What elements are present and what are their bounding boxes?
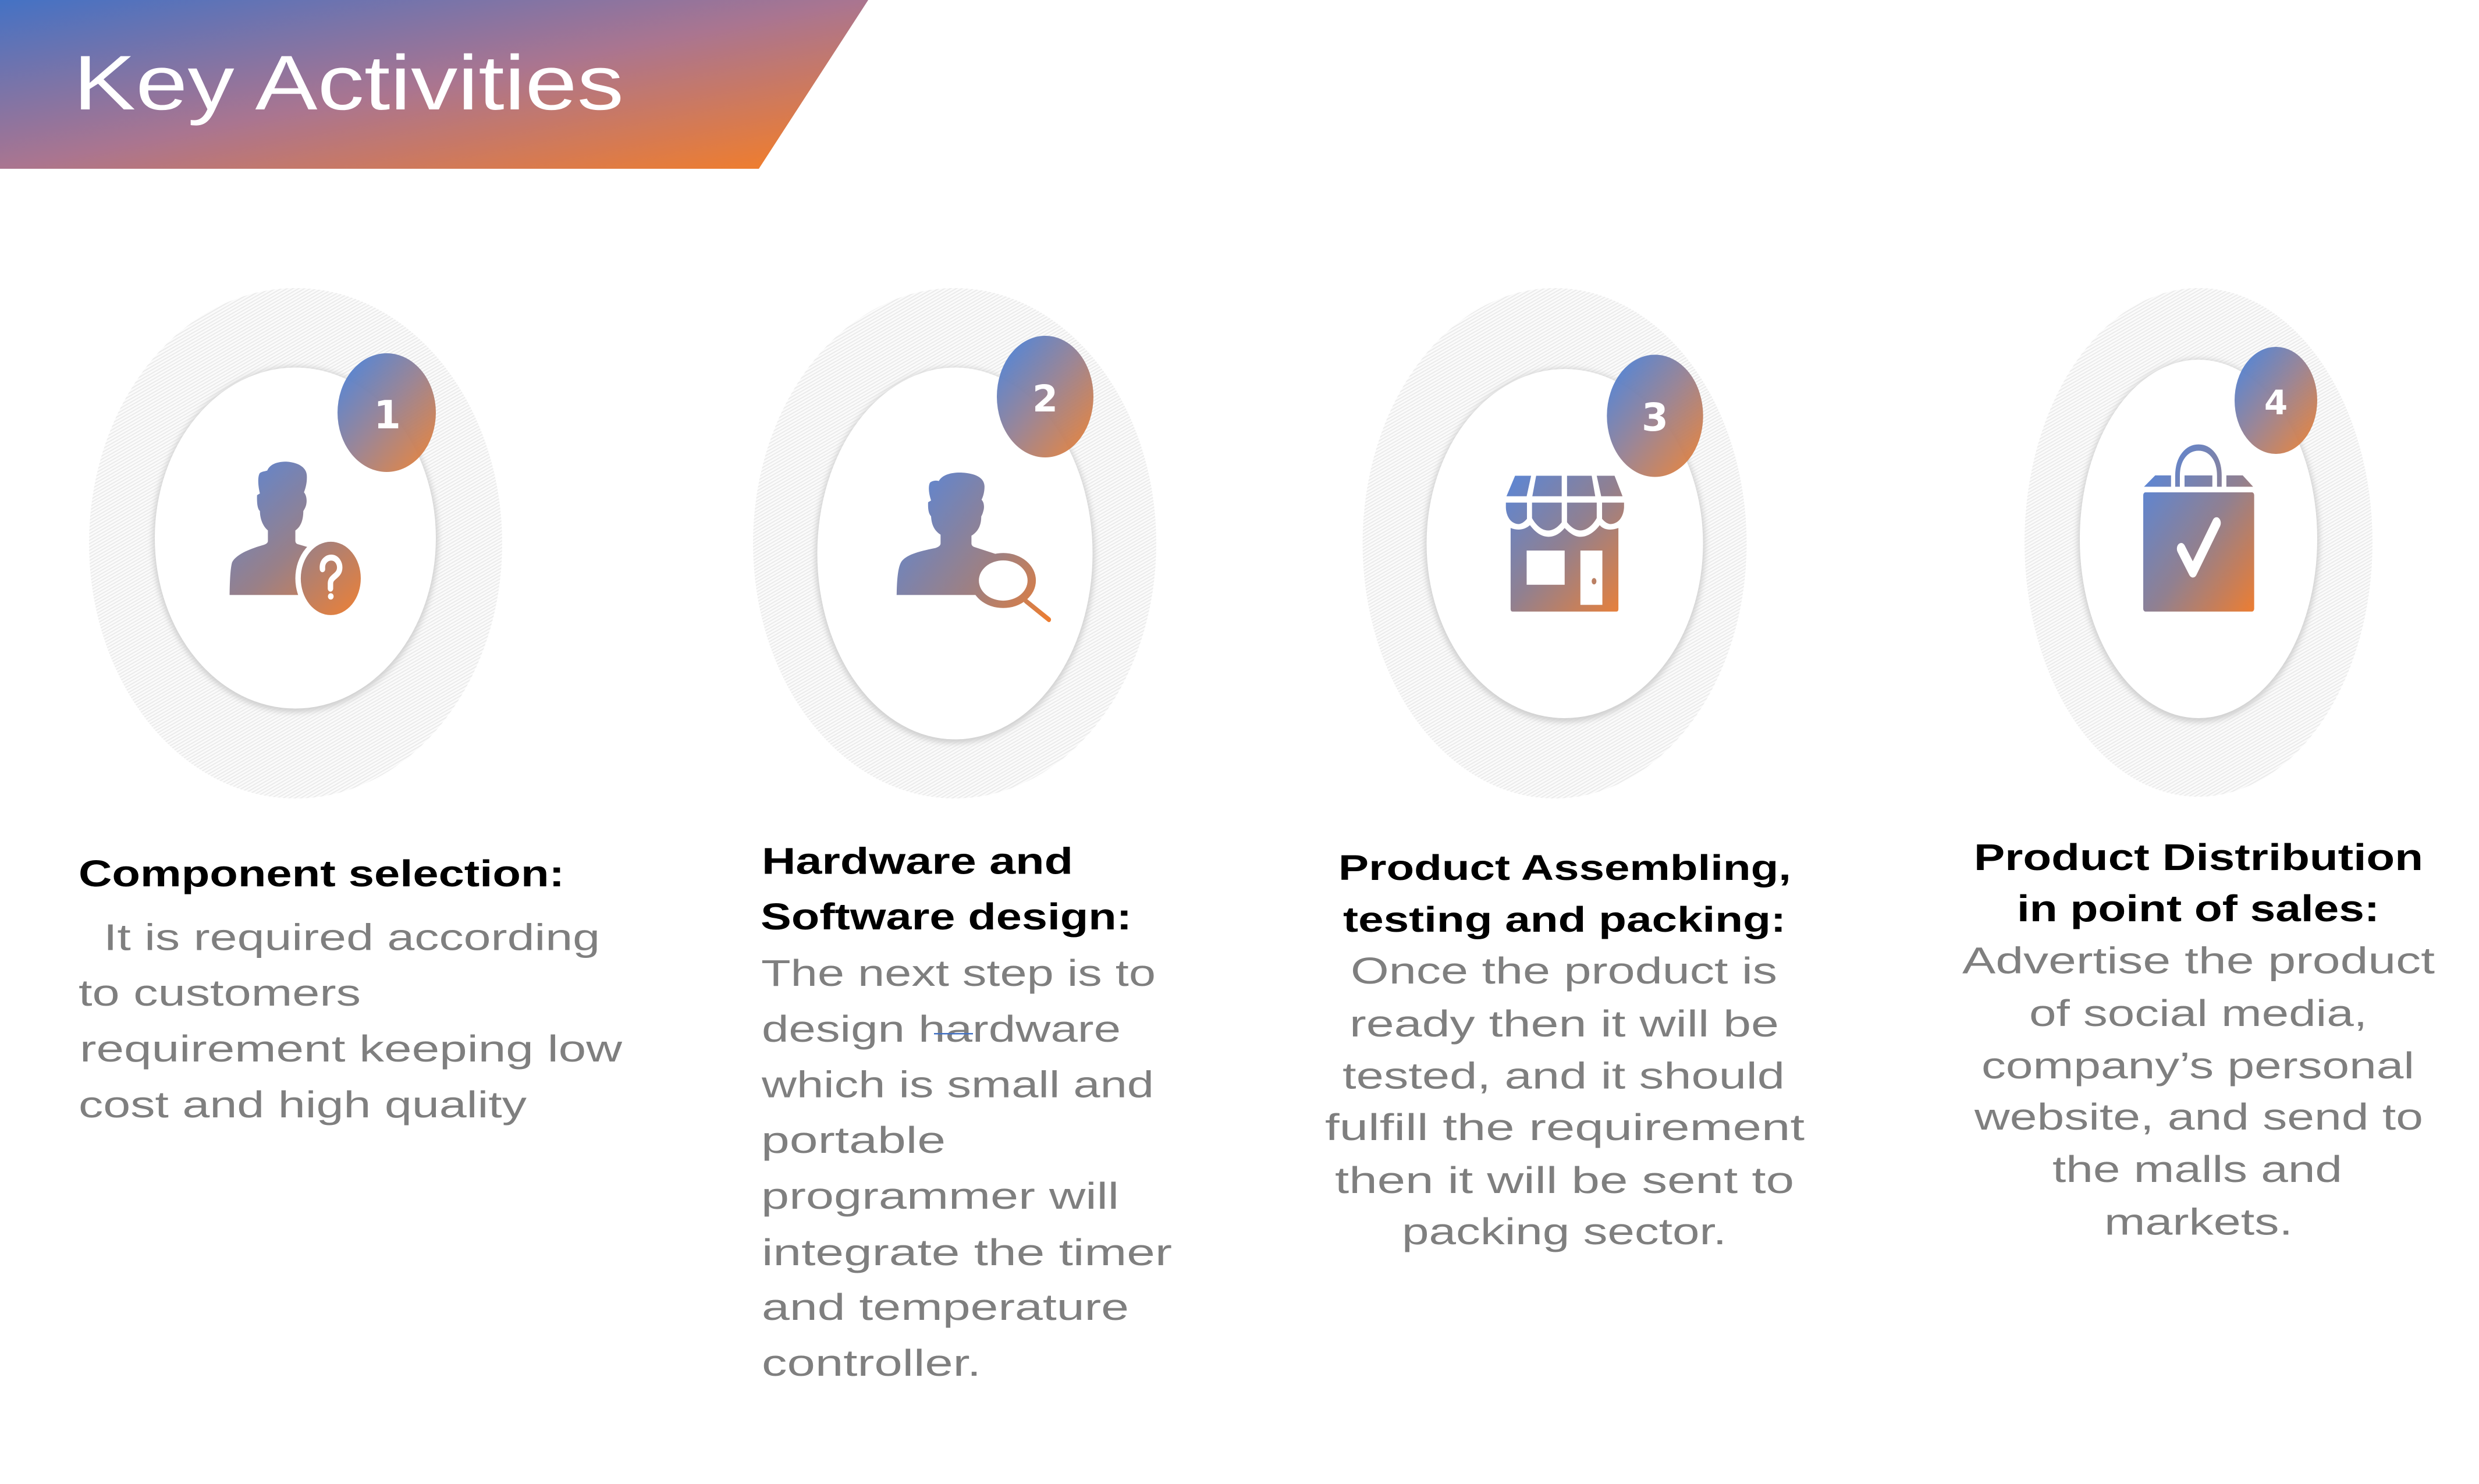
body text: [79, 916, 623, 1126]
heading: hardware and software design: [761, 840, 1132, 938]
outer ring: [753, 288, 1156, 798]
panel: step 2 hardware and software design: [753, 288, 1172, 1384]
badge number 3: [1607, 355, 1703, 477]
body text: design hardware: [762, 1008, 1121, 1050]
badge number 1: [338, 353, 436, 472]
inner circle shadow: [815, 367, 1095, 743]
badge number 2: 2: [1032, 378, 1058, 420]
body text: to customers: [79, 972, 361, 1014]
body text: website, and send to: [1974, 1096, 2423, 1138]
panel: step 1 component selection: [79, 288, 623, 1126]
outer ring: [1363, 288, 1747, 798]
body text: The next step is to: [761, 952, 1156, 994]
body text: markets.: [2104, 1201, 2293, 1243]
icon: shopping bag with check: [2143, 448, 2254, 612]
outer ring: [2025, 288, 2373, 797]
heading: product assembling: Product Assembling,: [1338, 848, 1791, 887]
panel: step 3 product assembling: [1325, 288, 1805, 1252]
heading: product assembling: [1338, 848, 1791, 939]
body text: packing sector.: [1402, 1210, 1727, 1252]
body text: Once the product is: [1351, 950, 1777, 992]
body text: integrate the timer: [762, 1231, 1172, 1273]
title banner: [0, 0, 868, 169]
icon: person with question mark: [230, 461, 366, 621]
body text: programmer will: [761, 1175, 1119, 1217]
badge number 3: 3: [1642, 395, 1668, 440]
heading: product distribution: in point of sales:: [2017, 887, 2379, 929]
icon: person with magnifier: [897, 473, 1049, 620]
body text: cost and high quality: [79, 1084, 527, 1126]
body text: tested, and it should: [1343, 1055, 1785, 1096]
heading: product distribution: Product Distribution: [1974, 836, 2423, 878]
heading: product assembling: testing and packing:: [1343, 900, 1786, 939]
badge number 2: [997, 336, 1093, 457]
body text: ready then it will be: [1349, 1003, 1779, 1045]
title: Key Activities: Key Activities: [73, 40, 624, 126]
body text: of social media,: [2029, 992, 2367, 1034]
inner circle: [1427, 369, 1703, 718]
body text: then it will be sent to: [1335, 1159, 1794, 1201]
heading: product distribution: [1974, 836, 2423, 929]
body text: the malls and: [2052, 1148, 2342, 1190]
body text: requirement keeping low: [80, 1028, 623, 1070]
inner circle shadow: [1425, 368, 1705, 722]
inner circle: [817, 368, 1093, 739]
inner circle shadow: [2077, 359, 2320, 722]
inner circle shadow: [152, 367, 438, 712]
outer ring: [89, 288, 502, 798]
body text: and temperature: [762, 1286, 1129, 1328]
body text: controller.: [762, 1342, 981, 1384]
body text: [1962, 939, 2435, 1243]
badge number 4: 4: [2264, 383, 2288, 423]
badge number 4: [2235, 347, 2317, 454]
body text: company’s personal: [1981, 1045, 2414, 1087]
panel: step 4 product distribution: [1962, 288, 2435, 1243]
body text: fulfill the requirement: [1325, 1106, 1805, 1148]
body text: [1325, 950, 1805, 1252]
stray blue line over the word hardware: [934, 1033, 973, 1035]
icon: storefront: [1506, 476, 1624, 612]
badge number 1: 1: [374, 392, 401, 438]
heading: component selection: Component selection:: [79, 853, 564, 894]
heading: hardware and software design: Hardware and: [762, 840, 1073, 882]
inner circle: [155, 368, 436, 709]
body text: It is required according: [104, 916, 600, 958]
body text: which is small and: [761, 1064, 1154, 1106]
body text: Advertise the product: [1962, 939, 2435, 981]
body text: [761, 952, 1172, 1384]
inner circle: [2080, 360, 2317, 718]
body text: portable: [761, 1119, 946, 1161]
heading: hardware and software design: Software design:: [761, 896, 1132, 938]
